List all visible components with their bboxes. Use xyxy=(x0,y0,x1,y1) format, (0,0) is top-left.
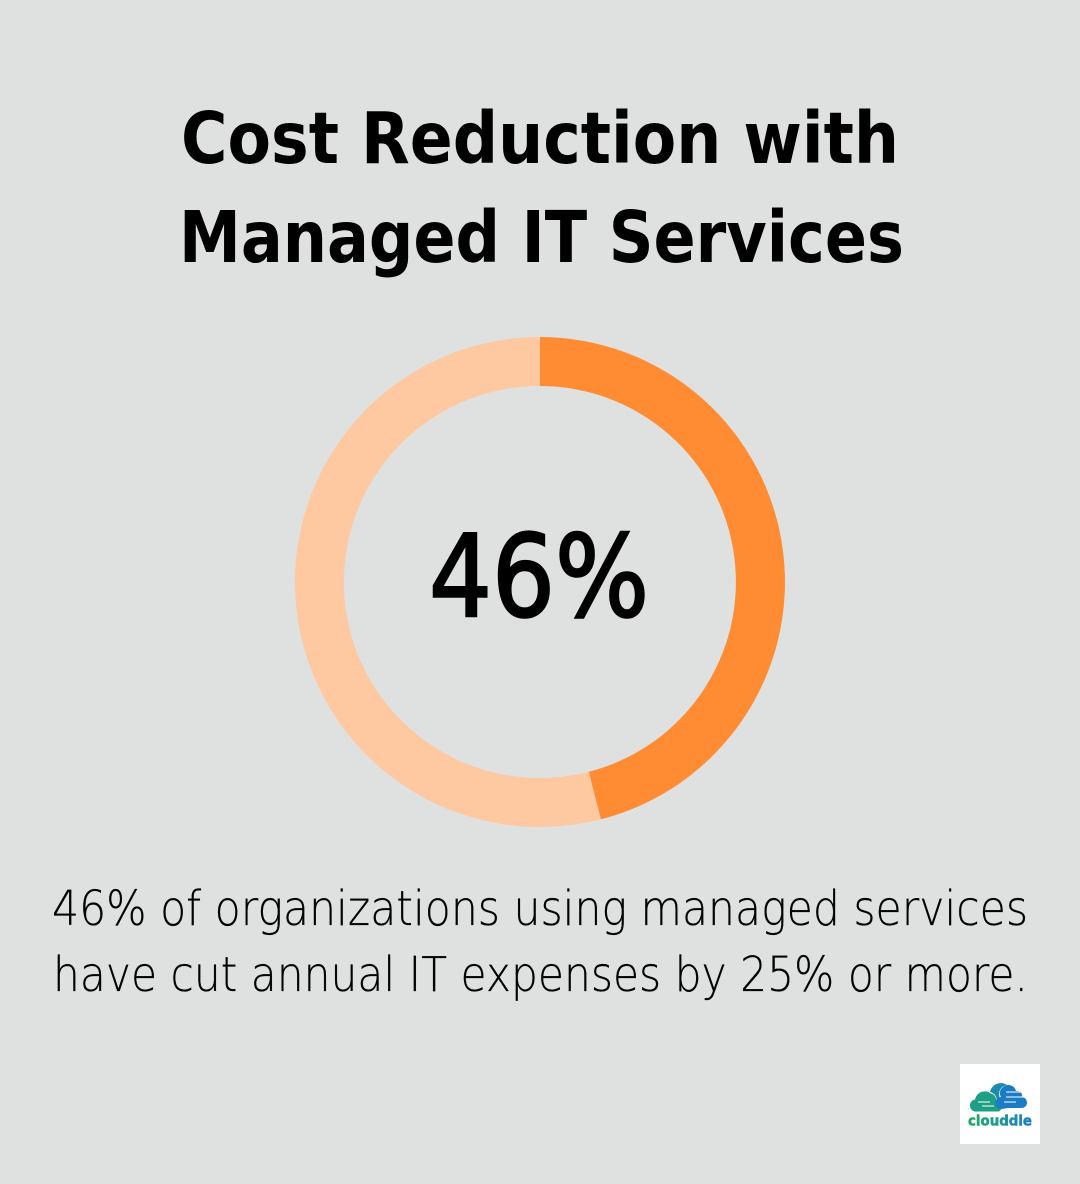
title: Cost Reduction with xyxy=(181,97,899,180)
logo: clouddle xyxy=(960,1064,1040,1144)
description text xyxy=(52,881,1028,1003)
remaining 54% segment xyxy=(295,337,601,827)
title: Managed IT Services xyxy=(179,196,904,279)
donut chart: 46% xyxy=(295,337,785,827)
logo wordmark: clouddle xyxy=(968,1114,1032,1130)
icon: clouds xyxy=(970,1083,1027,1112)
center value: 46% xyxy=(429,511,649,643)
title xyxy=(179,97,904,279)
highlighted 46% segment xyxy=(540,337,785,819)
